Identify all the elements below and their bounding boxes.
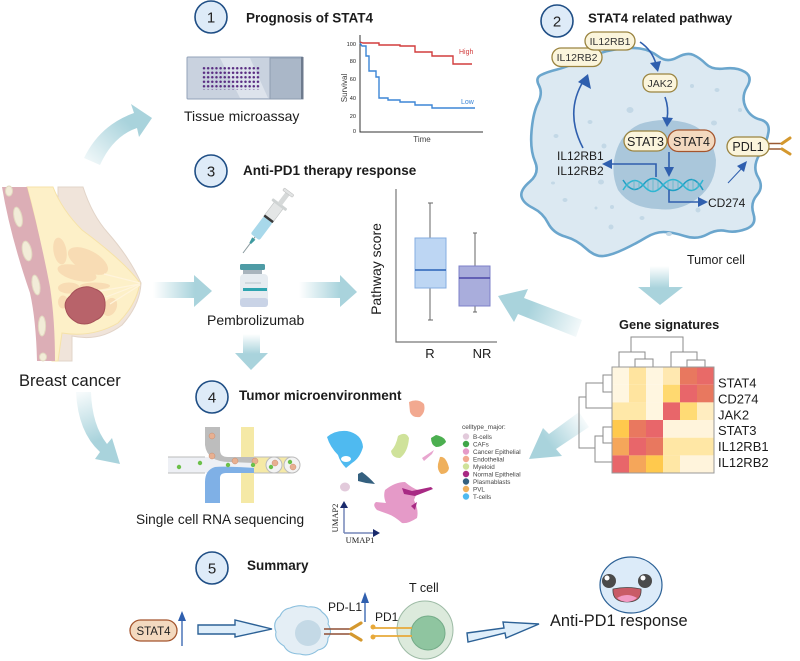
label: tumor cell: Tumor cell xyxy=(687,253,745,267)
label: CD274: CD274 xyxy=(708,196,746,210)
badge 2: 2 xyxy=(553,14,561,30)
survival chart: High xyxy=(459,49,474,56)
badge 1: 1 xyxy=(207,10,215,26)
box plot: pathway score xyxy=(368,189,497,361)
UMAP axes: UMAP2 xyxy=(330,504,340,532)
icon: happy face xyxy=(600,557,662,613)
receptor: PDL1 xyxy=(727,137,790,156)
receptor: IL12RB1: IL12RB1 xyxy=(590,36,631,48)
icon: microfluidic droplet device xyxy=(168,427,300,503)
icon: pembrolizumab vial xyxy=(240,264,268,307)
survival chart: 80 xyxy=(350,59,356,65)
legend: cell type: Endothelial xyxy=(473,456,504,464)
tumor xyxy=(65,287,105,324)
tumor cell xyxy=(521,48,769,256)
heading: summary: Summary xyxy=(247,558,309,573)
legend: cell type: PVL xyxy=(473,486,485,494)
legend: cell type: CAFs xyxy=(473,442,489,448)
cluster: myeloid xyxy=(391,434,409,458)
illustration: breast anatomy with tumor xyxy=(2,186,141,361)
panel 3: anti-PD1 therapy response xyxy=(195,155,497,361)
receptor: PDL1: PDL1 xyxy=(732,140,764,154)
UMAP axes xyxy=(330,501,380,545)
arrow: tumor cell to gene signatures xyxy=(638,266,683,305)
arrow: STAT to DNA xyxy=(664,152,674,177)
heading: tumor microenvironment: Tumor microenvironment xyxy=(239,388,402,403)
legend: cell type: T-cells xyxy=(473,494,491,501)
hollow arrow: to anti-PD1 response xyxy=(467,622,539,642)
icon: tissue microarray slide xyxy=(187,57,304,99)
legend: cell type: Myeloid xyxy=(473,464,495,471)
badge 4 xyxy=(196,381,228,413)
arrow: pembrolizumab to pathway chart xyxy=(299,275,357,307)
panel 4: tumor microenvironment xyxy=(136,381,521,545)
icon: tumor cell xyxy=(275,606,330,655)
label: PD1: PD1 xyxy=(375,610,399,624)
arrow: pembrolizumab to tumor microenvironment xyxy=(235,334,268,370)
hollow arrow: STAT4 to tumor cell xyxy=(198,620,272,637)
protein: STAT4: STAT4 xyxy=(673,135,710,149)
panel: gene signatures xyxy=(579,317,769,473)
legend: cell type: Cancer Epithelial xyxy=(473,449,521,456)
survival chart: Survival xyxy=(340,74,349,102)
protein: STAT3: STAT3 xyxy=(627,135,664,149)
label: IL12RB genes: IL12RB1 xyxy=(557,149,604,163)
UMAP axes: UMAP1 xyxy=(346,535,374,545)
icon: syringe xyxy=(236,186,296,258)
arrow: CD274 to PDL1 xyxy=(728,161,747,183)
heading: STAT4 related pathway: STAT4 related pathway xyxy=(588,10,733,26)
dendrograms xyxy=(579,337,705,462)
box plot: pathway score: NR xyxy=(473,346,491,361)
heatmap gene labels: IL12RB1 xyxy=(718,439,769,454)
survival chart: 60 xyxy=(350,77,356,83)
legend: cell type: B-cells xyxy=(473,434,492,441)
badge 4: 4 xyxy=(208,390,216,406)
label: single cell RNA sequencing: Single cell RNA sequencing xyxy=(136,512,304,527)
survival chart: 0 xyxy=(353,129,356,135)
legend: cell type xyxy=(462,424,521,501)
receptor: IL12RB1 xyxy=(585,32,635,50)
heatmap gene labels: IL12RB2 xyxy=(718,455,769,470)
protein: STAT3 xyxy=(624,131,667,151)
legend: cell type: celltype_major: xyxy=(462,424,506,431)
arrow: DNA to CD274 xyxy=(669,190,708,207)
UMAP plot xyxy=(327,400,449,545)
panel 1: prognosis of STAT4 xyxy=(184,1,483,144)
panel 2: STAT4 related pathway xyxy=(521,5,790,267)
heatmap gene labels: STAT3 xyxy=(718,423,757,438)
heatmap gene labels: STAT4 xyxy=(718,376,757,390)
arrow: JAK2 to STAT xyxy=(662,97,673,127)
survival chart: 20 xyxy=(350,114,356,120)
heatmap gene labels: CD274 xyxy=(718,392,758,406)
heatmap xyxy=(612,367,714,473)
badge 5 xyxy=(196,552,228,584)
box plot: pathway score: R xyxy=(425,346,435,361)
arrow: breast to tissue microarray xyxy=(84,104,152,165)
cluster: T-cells xyxy=(327,431,363,468)
pill: STAT4 xyxy=(130,620,177,641)
heatmap gene labels: JAK2 xyxy=(718,408,749,422)
arrow: PD-L1 up xyxy=(361,592,369,622)
label: pembrolizumab: Pembrolizumab xyxy=(207,312,304,328)
label: T cell: T cell xyxy=(409,581,439,595)
cluster: normal epithelial xyxy=(402,487,433,510)
panel 5: summary xyxy=(130,552,688,659)
DNA helix xyxy=(623,178,703,192)
PD-L1 receptor xyxy=(324,623,361,640)
icon: T cell with PD1 xyxy=(370,601,453,659)
survival chart: 100 xyxy=(347,42,356,48)
arrow: heatmap to tumor microenvironment xyxy=(529,412,589,459)
arrow: STAT4 up xyxy=(178,611,186,646)
arrow: IL12RB1 to JAK2 xyxy=(640,42,661,72)
heading: prognosis of STAT4: Prognosis of STAT4 xyxy=(246,10,373,26)
legend: cell type: Plasmablasts xyxy=(473,479,510,486)
label: IL12RB genes: IL12RB2 xyxy=(557,164,604,178)
cluster: endothelial xyxy=(409,400,424,417)
cluster: B-cells xyxy=(340,482,350,492)
heatmap gene labels xyxy=(718,376,769,470)
label: PD-L1: PD-L1 xyxy=(328,600,362,614)
protein: STAT4 xyxy=(668,130,715,152)
receptor: IL12RB2: IL12RB2 xyxy=(557,52,598,64)
badge 3 xyxy=(195,155,227,187)
badge 2 xyxy=(541,5,573,37)
survival chart: Time xyxy=(413,135,431,144)
badge 1 xyxy=(195,1,227,33)
cluster: plasmablasts xyxy=(358,472,375,484)
protein: JAK2 xyxy=(643,74,677,92)
panel: breast cancer xyxy=(2,186,141,390)
survival chart xyxy=(340,35,483,144)
badge 3: 3 xyxy=(207,164,215,180)
label: breast cancer: Breast cancer xyxy=(19,372,121,390)
box plot: pathway score: Pathway score xyxy=(368,223,384,315)
cluster: PVL xyxy=(438,457,449,474)
arrow: IL12RB genes to receptors xyxy=(574,74,591,148)
cluster: cancer epithelial xyxy=(374,482,418,523)
pill: STAT4: STAT4 xyxy=(136,626,171,638)
label: tissue microassay: Tissue microassay xyxy=(184,108,299,124)
cluster: thin epithelial streak xyxy=(422,450,434,461)
arrow: breast to pembrolizumab xyxy=(153,275,212,307)
survival chart: Low xyxy=(461,99,475,106)
legend: cell type: Normal Epithelial xyxy=(473,472,521,478)
heading: anti-PD1 therapy response: Anti-PD1 therapy response xyxy=(243,163,417,178)
arrow: breast to single cell sequencing xyxy=(76,392,120,464)
survival chart: 40 xyxy=(350,96,356,102)
arrow: DNA to IL12RB genes xyxy=(602,159,656,177)
cluster: CAFs xyxy=(431,435,446,447)
label: anti-PD1 response: Anti-PD1 response xyxy=(550,612,688,630)
badge 5: 5 xyxy=(208,560,216,578)
arrow: gene signatures to pathway chart xyxy=(498,289,582,337)
protein: JAK2: JAK2 xyxy=(647,78,673,90)
heading: gene signatures: Gene signatures xyxy=(619,317,719,332)
receptor: IL12RB2 xyxy=(552,48,602,66)
